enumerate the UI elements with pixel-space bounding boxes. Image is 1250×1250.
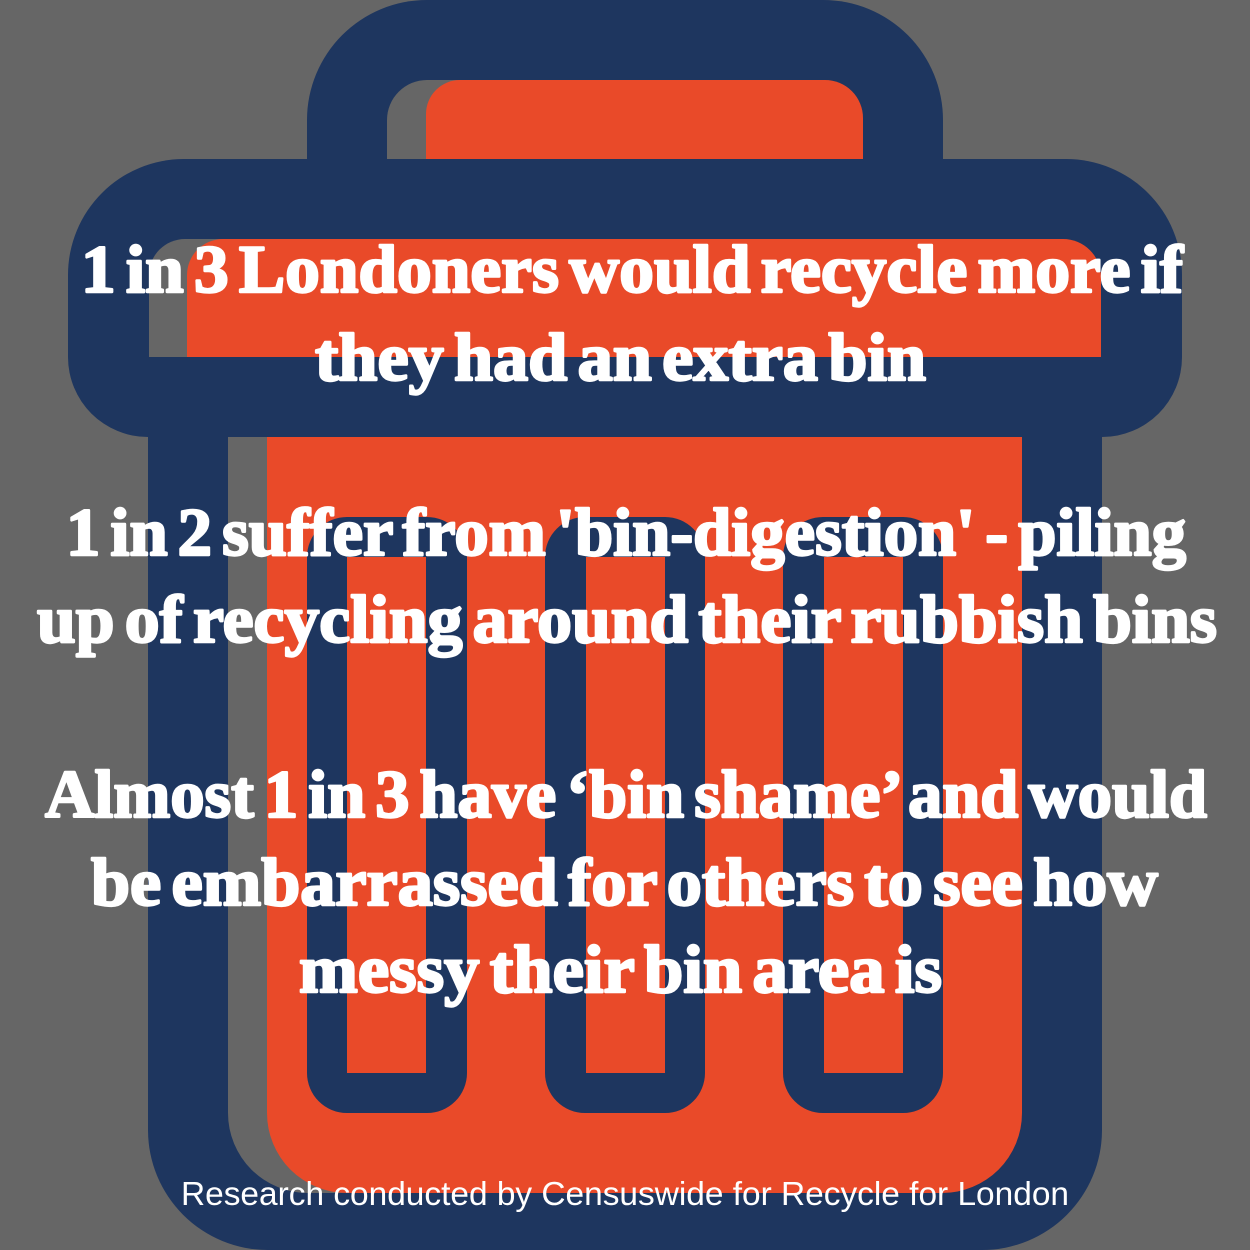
bin lid <box>68 159 1182 437</box>
source credit: Research conducted by Censuswide for Recycle for London <box>181 1175 1069 1212</box>
statistic: bin shame: messy their bin area is <box>299 931 942 1007</box>
statistic: extra bin: they had an extra bin <box>315 319 926 395</box>
statistic: bin-digestion: 1 in 2 suffer from 'bin-digestion' - piling <box>66 494 1186 570</box>
bin body <box>148 420 1102 1250</box>
statistic: bin shame <box>45 756 1207 1007</box>
bin slot left <box>307 517 467 1113</box>
statistic: bin-digestion: up of recycling around their rubbish bins <box>37 581 1217 657</box>
statistic: bin-digestion <box>37 494 1217 657</box>
statistic: bin shame: be embarrassed for others to see how <box>91 844 1158 920</box>
statistic: extra bin: 1 in 3 Londoners would recycle more if <box>81 231 1184 307</box>
statistic: bin shame: Almost 1 in 3 have ‘bin shame’ and would <box>45 756 1207 832</box>
statistic: extra bin <box>81 231 1184 395</box>
bin handle <box>307 0 943 170</box>
bin slot right <box>783 517 943 1113</box>
bin slot middle <box>545 517 705 1113</box>
